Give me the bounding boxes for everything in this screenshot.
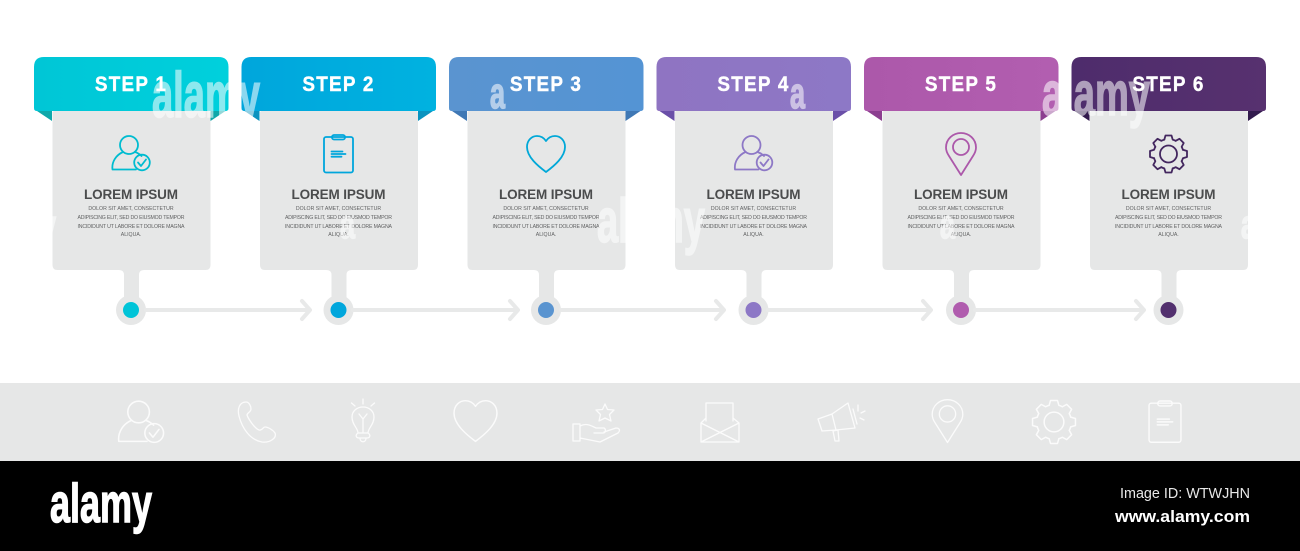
step 5 header ribbon	[864, 57, 1058, 111]
step 4 text: ALIQUA.	[743, 232, 764, 238]
arrow 3 to 4	[561, 301, 724, 319]
step 4 icon: user check	[735, 136, 772, 170]
strip icon: hand with star	[573, 404, 619, 442]
step 3 header ribbon	[449, 57, 644, 111]
step 1 text	[78, 206, 185, 238]
step 1 text: INCIDIDUNT UT LABORE ET DOLORE MAGNA	[78, 224, 185, 230]
step 1 text: DOLOR SIT AMET, CONSECTETUR	[88, 206, 174, 212]
panel: step 5	[864, 57, 1058, 325]
watermarks: a	[1241, 203, 1257, 247]
panel: step 6	[1072, 57, 1266, 325]
step 2 heading: STEP 2	[302, 73, 375, 96]
step 2 node	[324, 295, 354, 325]
step 1 node	[116, 295, 146, 325]
footer logo: alamy	[50, 472, 152, 534]
step 3 text	[492, 206, 600, 238]
step 6 text: ALIQUA.	[1158, 232, 1179, 238]
step 1 header ribbon	[34, 57, 228, 111]
panel: step 1	[34, 57, 228, 325]
step 3 text: ALIQUA.	[536, 232, 556, 238]
strip icon: gear	[1033, 401, 1075, 443]
step 4 text	[700, 206, 808, 238]
step 2 header ribbon	[242, 57, 436, 111]
step 1 card	[52, 111, 210, 302]
step 6 text	[1115, 206, 1223, 238]
step 4 header ribbon	[656, 57, 851, 111]
step 5 text: DOLOR SIT AMET, CONSECTETUR	[918, 206, 1004, 212]
strip icon: location pin	[932, 400, 963, 442]
arrow 4 to 5	[768, 301, 931, 319]
strip icon: megaphone	[818, 403, 865, 441]
step 2 card	[260, 111, 418, 302]
watermarks: alamy	[1042, 60, 1150, 129]
step 1 heading: STEP 1	[95, 73, 167, 96]
step 6 card	[1090, 111, 1248, 302]
step 2 text	[285, 206, 393, 238]
step 5 card	[882, 111, 1040, 302]
step 2 title: LOREM IPSUM	[292, 187, 386, 202]
step 6 header ribbon	[1072, 57, 1266, 111]
footer image id: Image ID: WTWJHN	[1120, 485, 1250, 502]
watermarks: a	[490, 69, 505, 118]
step 5 title: LOREM IPSUM	[914, 187, 1008, 202]
step 1 icon: user check	[112, 136, 150, 170]
step 5 node	[946, 295, 976, 325]
step 3 fold	[449, 109, 644, 121]
step 5 icon: location pin	[946, 133, 976, 175]
step 3 node	[531, 295, 561, 325]
step 5 text: INCIDIDUNT UT LABORE ET DOLORE MAGNA	[908, 224, 1015, 230]
step 2 text: ALIQUA.	[328, 232, 349, 238]
watermarks: a	[940, 203, 956, 247]
step 2 text: ADIPISCING ELIT, SED DO EIUSMOD TEMPOR	[285, 215, 392, 221]
step 6 text: ADIPISCING ELIT, SED DO EIUSMOD TEMPOR	[1115, 215, 1222, 221]
step 6 node	[1154, 295, 1184, 325]
arrow 2 to 3	[353, 301, 518, 319]
step 5 heading: STEP 5	[925, 73, 997, 96]
arrow 5 to 6	[975, 301, 1144, 319]
arrow 1 to 2	[146, 301, 310, 319]
step 4 text: ADIPISCING ELIT, SED DO EIUSMOD TEMPOR	[700, 215, 807, 221]
step 6 heading: STEP 6	[1132, 73, 1205, 96]
strip icon: light bulb	[352, 399, 374, 442]
step 4 node	[738, 295, 768, 325]
strip icon: phone	[238, 402, 275, 442]
step 2 icon: clipboard	[324, 135, 353, 172]
step 4 text: INCIDIDUNT UT LABORE ET DOLORE MAGNA	[700, 224, 808, 230]
panel: step 2	[242, 57, 436, 325]
strip icon: envelope	[701, 403, 739, 442]
step 3 icon: heart	[527, 136, 565, 172]
step 2 fold	[242, 109, 436, 121]
icon strip	[0, 383, 1300, 461]
step 3 card	[468, 111, 626, 302]
step 3 text: ADIPISCING ELIT, SED DO EIUSMOD TEMPOR	[492, 215, 600, 221]
step 5 text	[908, 206, 1015, 238]
step 4 fold	[656, 109, 851, 121]
footer url: www.alamy.com	[1114, 507, 1250, 526]
step 2 text: INCIDIDUNT UT LABORE ET DOLORE MAGNA	[285, 224, 393, 230]
step 4 card	[675, 111, 833, 302]
step 4 title: LOREM IPSUM	[706, 187, 800, 202]
strip icon: user check	[119, 401, 164, 442]
step 1 fold	[34, 109, 228, 121]
step 5 text: ADIPISCING ELIT, SED DO EIUSMOD TEMPOR	[908, 215, 1015, 221]
step 3 heading: STEP 3	[510, 73, 582, 96]
footer bar	[0, 461, 1300, 551]
watermarks: alamy	[152, 59, 260, 131]
step 1 text: ALIQUA.	[121, 232, 141, 238]
step 6 text: DOLOR SIT AMET, CONSECTETUR	[1126, 206, 1211, 212]
watermarks: alamy	[597, 187, 705, 256]
strip icon: clipboard	[1149, 401, 1181, 442]
watermarks: y	[41, 203, 57, 247]
step 6 text: INCIDIDUNT UT LABORE ET DOLORE MAGNA	[1115, 224, 1223, 230]
step 3 text: DOLOR SIT AMET, CONSECTETUR	[503, 206, 589, 212]
step 4 heading: STEP 4	[717, 73, 790, 96]
step 3 title: LOREM IPSUM	[499, 187, 593, 202]
step 5 fold	[864, 109, 1058, 121]
watermarks: a	[790, 69, 805, 118]
step 1 title: LOREM IPSUM	[84, 187, 178, 202]
step 2 text: DOLOR SIT AMET, CONSECTETUR	[296, 206, 381, 212]
step 6 title: LOREM IPSUM	[1122, 187, 1216, 202]
panel: step 3	[449, 57, 644, 325]
step 6 icon: gear	[1150, 136, 1187, 172]
step 6 fold	[1072, 109, 1266, 121]
panel: step 4	[656, 57, 851, 325]
watermarks: a	[340, 203, 356, 247]
step 3 text: INCIDIDUNT UT LABORE ET DOLORE MAGNA	[492, 224, 600, 230]
step 1 text: ADIPISCING ELIT, SED DO EIUSMOD TEMPOR	[78, 215, 185, 221]
step 5 text: ALIQUA.	[951, 232, 971, 238]
watermarks	[41, 59, 1257, 256]
step 4 text: DOLOR SIT AMET, CONSECTETUR	[711, 206, 796, 212]
strip icon: heart	[454, 401, 497, 441]
